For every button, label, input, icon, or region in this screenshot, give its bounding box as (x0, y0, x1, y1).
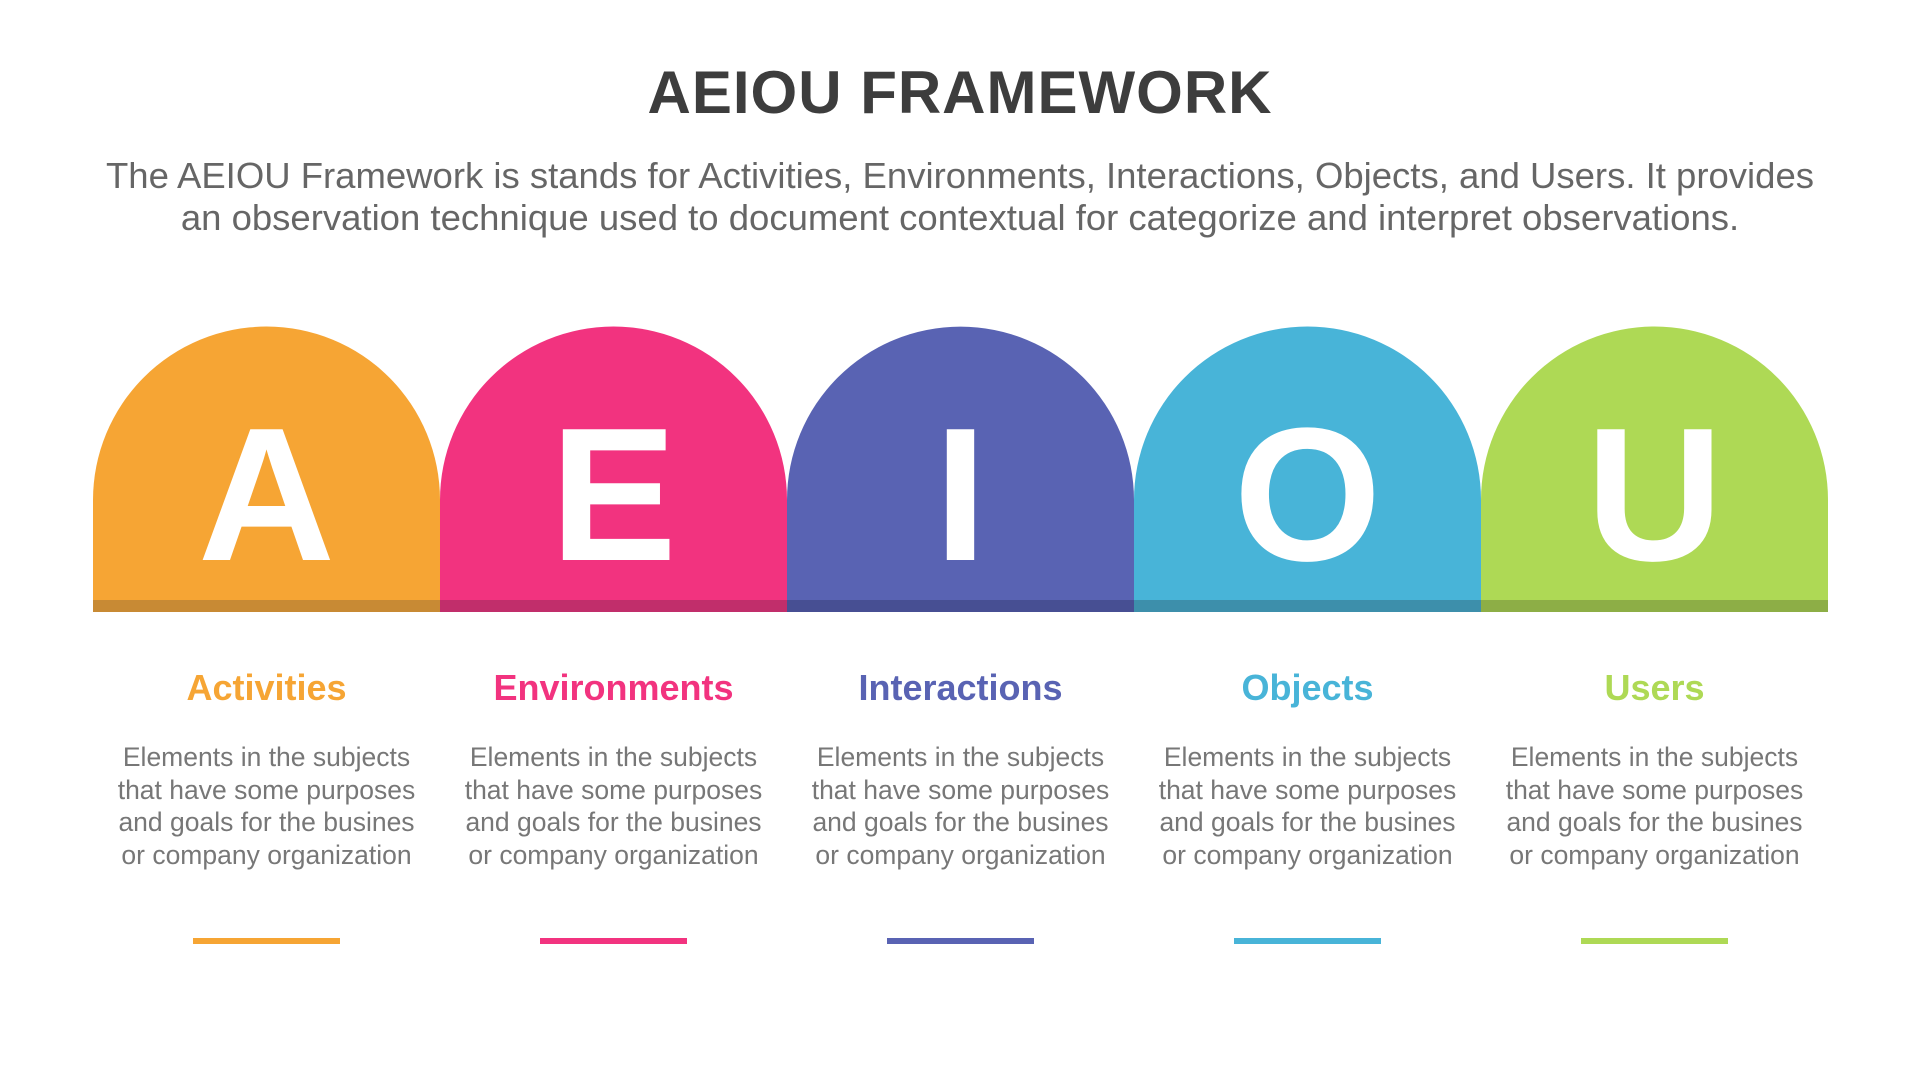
column: Environments: Environments (493, 667, 734, 708)
column: Activities: or company organization (121, 840, 412, 870)
column: Environments: that have some purposes (465, 774, 762, 804)
column: Environments: or company organization (468, 840, 759, 870)
arch I: I (934, 389, 987, 601)
column: Objects: and goals for the busines (1159, 807, 1456, 837)
column: Users: and goals for the busines (1506, 807, 1803, 837)
subtitle (106, 155, 1814, 238)
arch U: U (1586, 389, 1723, 601)
subtitle: The AEIOU Framework is stands for Activities, Environments, Interactions, Objects, and Users. It provides (106, 155, 1814, 196)
column: Objects: Objects (1241, 667, 1374, 708)
column: Environments (465, 667, 762, 944)
column: Interactions: that have some purposes (812, 774, 1109, 804)
arches chart (93, 326, 1828, 612)
column: Environments: and goals for the busines (465, 807, 762, 837)
arch O (1134, 326, 1481, 612)
column: Users: Users (1604, 667, 1705, 708)
arch O: O (1234, 389, 1381, 601)
column: Interactions: or company organization (815, 840, 1106, 870)
column: Interactions: Elements in the subjects (817, 742, 1104, 772)
arch E (440, 326, 787, 612)
column: Activities: Activities (186, 667, 347, 708)
column: Interactions: Interactions (858, 667, 1063, 708)
column: Objects: that have some purposes (1159, 774, 1456, 804)
column: Objects (1159, 667, 1456, 944)
column: Users: that have some purposes (1506, 774, 1803, 804)
column: Users: Elements in the subjects (1511, 742, 1798, 772)
subtitle: an observation technique used to document contextual for categorize and interpret observations. (181, 197, 1739, 238)
arch E: E (550, 389, 677, 601)
column: Objects: Elements in the subjects (1164, 742, 1451, 772)
arch U (1481, 326, 1828, 612)
arch A: A (198, 389, 335, 601)
column: Activities: that have some purposes (118, 774, 415, 804)
title: AEIOU FRAMEWORK (648, 59, 1272, 126)
arch I (787, 327, 1134, 612)
column: Interactions (812, 667, 1109, 944)
column: Users (1506, 667, 1803, 944)
arch A (93, 327, 440, 612)
column: Objects: or company organization (1162, 840, 1453, 870)
column: Interactions: and goals for the busines (812, 807, 1109, 837)
column: Activities: and goals for the busines (118, 807, 415, 837)
column: Activities: Elements in the subjects (123, 742, 410, 772)
column: Activities (118, 667, 415, 944)
column: Environments: Elements in the subjects (470, 742, 757, 772)
column: Users: or company organization (1509, 840, 1800, 870)
